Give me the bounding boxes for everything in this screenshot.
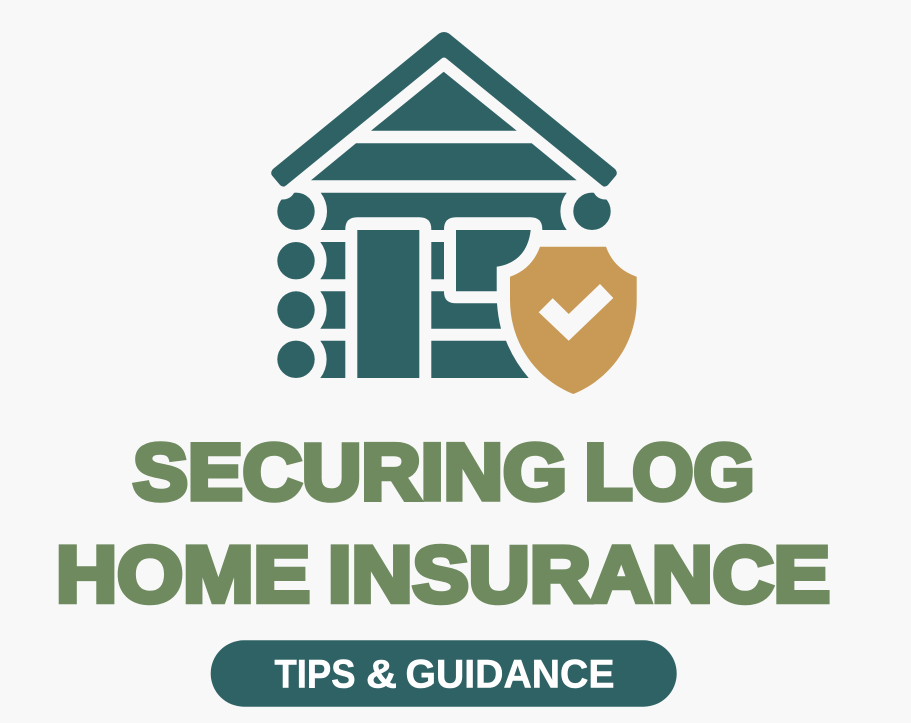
title line 2	[56, 529, 830, 618]
title	[56, 427, 830, 618]
top wall log with door and window cutouts	[321, 193, 567, 230]
pill label: &	[366, 652, 397, 696]
left wall logs	[320, 242, 345, 378]
notches in top log ends	[270, 174, 618, 200]
gable top triangle	[371, 72, 517, 131]
title line 2: HOME	[56, 529, 310, 618]
icon: check mark	[539, 284, 613, 341]
pill label	[274, 652, 614, 696]
door	[357, 230, 419, 378]
gable lower band	[311, 143, 577, 180]
icon: log cabin with shield	[270, 32, 637, 394]
title line 1	[133, 427, 754, 516]
title line 1: LOG	[584, 427, 754, 516]
subtitle pill	[211, 640, 677, 707]
window	[456, 230, 531, 291]
log ends	[277, 193, 611, 378]
right wall logs	[431, 242, 529, 378]
pill label: GUIDANCE	[406, 652, 614, 696]
icon: shield	[510, 247, 637, 394]
pill label: TIPS	[274, 652, 356, 696]
title line 2: INSURANCE	[328, 529, 830, 618]
title line 1: SECURING	[133, 427, 567, 516]
cabin roof beam	[271, 32, 617, 187]
pill background	[211, 640, 677, 707]
